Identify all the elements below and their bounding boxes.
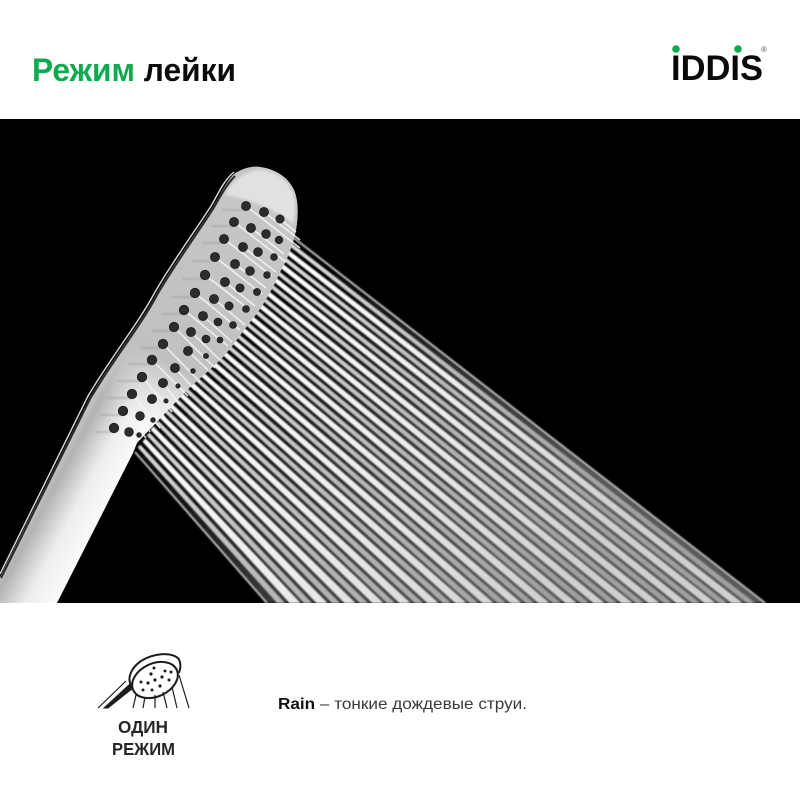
nozzle shadow lines bbox=[95, 210, 246, 432]
logo: IDDIS: IDDIS bbox=[671, 49, 763, 88]
icon label: РЕЖИМ bbox=[112, 739, 175, 759]
jets crossing the head face bbox=[123, 206, 300, 438]
shower head face bbox=[98, 166, 298, 418]
secondary water jets bbox=[138, 240, 755, 603]
head top highlight bbox=[225, 170, 295, 224]
title: Режим лейки bbox=[32, 52, 236, 88]
main water jets bbox=[142, 245, 742, 603]
outer boundary jets bbox=[135, 235, 765, 603]
water spray background bbox=[142, 273, 764, 603]
chrome edge bbox=[0, 172, 234, 574]
icon: shower head with one mode bbox=[98, 654, 189, 708]
description: Rain – тонкие дождевые струи. bbox=[278, 696, 527, 713]
icon label: ОДИН bbox=[118, 717, 168, 737]
photo: shower head with water jets bbox=[0, 119, 800, 603]
shower body and handle bbox=[0, 167, 298, 603]
logo: IDDIS: ® bbox=[761, 45, 767, 54]
spray lines bbox=[133, 675, 189, 708]
nozzles bbox=[109, 201, 284, 437]
nozzle dots bbox=[140, 666, 172, 692]
